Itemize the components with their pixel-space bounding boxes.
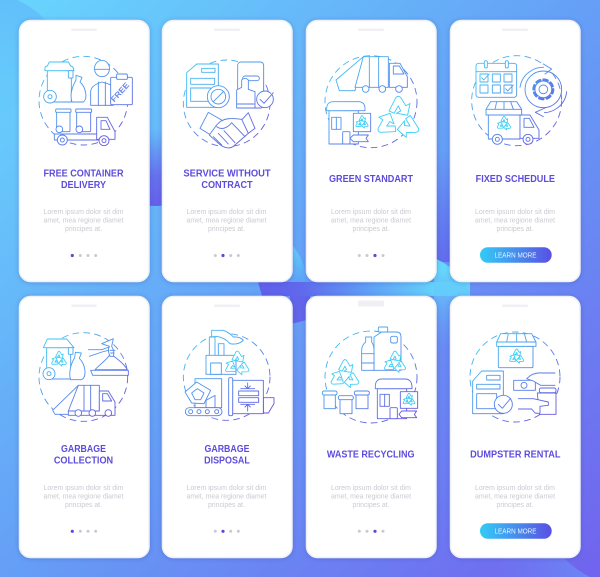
body text: principes at.: [65, 226, 102, 233]
body text: amet, mea regione diamet: [331, 217, 411, 224]
heading: GARBAGE: [204, 444, 250, 455]
icon: calendar, gear and truck: [472, 56, 567, 146]
heading: FREE CONTAINER: [44, 168, 124, 179]
heading: WASTE RECYCLING: [327, 449, 415, 460]
body text: amet, mea regione diamet: [186, 493, 267, 500]
body text: [44, 209, 124, 233]
body text: [475, 485, 555, 509]
panel: service without contract: [162, 20, 292, 282]
card background: [162, 296, 292, 558]
body text: amet, mea regione diamet: [186, 217, 267, 224]
body text: principes at.: [208, 502, 245, 509]
panel: green standart: [306, 20, 436, 282]
button: learn more: LEARN MORE: [494, 528, 537, 536]
body text: [186, 209, 267, 233]
heading: DISPOSAL: [204, 455, 250, 466]
body text: amet, mea regione diamet: [475, 493, 555, 500]
card background: [450, 296, 580, 558]
heading: SERVICE WITHOUT: [183, 168, 271, 179]
body text: amet, mea regione diamet: [331, 493, 411, 500]
heading: GREEN STANDART: [329, 174, 413, 185]
icon: garbage truck, shop and recycling: [325, 56, 423, 148]
heading: [183, 168, 271, 191]
pagination dots: [71, 28, 97, 257]
body text: [186, 485, 267, 509]
icon: factory, conveyor and press: [183, 330, 274, 420]
heading: COLLECTION: [54, 455, 113, 466]
card background: [20, 20, 149, 282]
label: FREE: FREE: [109, 80, 132, 104]
pagination dots: [358, 28, 384, 257]
body text: amet, mea regione diamet: [44, 493, 124, 500]
button: learn more: LEARN MORE: [494, 252, 537, 260]
heading: CONTRACT: [201, 180, 253, 191]
heading: DUMPSTER RENTAL: [470, 449, 560, 460]
body text: principes at.: [352, 226, 390, 233]
heading: [204, 444, 250, 466]
body text: Lorem ipsum dolor sit dim: [475, 485, 555, 492]
panel: free container delivery: [20, 20, 149, 282]
panel: waste recycling: [306, 296, 436, 558]
heading: GARBAGE: [61, 444, 106, 455]
panel: garbage disposal: [162, 296, 292, 558]
icon: dumpster, contract and payment: [470, 332, 560, 422]
body text: principes at.: [208, 226, 245, 233]
panel: fixed schedule: [450, 20, 580, 282]
body text: Lorem ipsum dolor sit dim: [331, 485, 411, 492]
pagination dots: [214, 304, 240, 533]
body text: principes at.: [496, 226, 534, 233]
heading: FIXED SCHEDULE: [476, 174, 555, 185]
body text: principes at.: [496, 502, 534, 509]
pagination dots: [358, 300, 384, 533]
body text: Lorem ipsum dolor sit dim: [44, 485, 124, 492]
notch: [502, 28, 528, 31]
button: learn more: [480, 247, 552, 263]
heading: [54, 444, 113, 466]
body text: principes at.: [65, 502, 102, 509]
card background: [306, 20, 436, 282]
panel: garbage collection: [20, 296, 149, 558]
body text: Lorem ipsum dolor sit dim: [475, 209, 555, 216]
icon: bins, worker and truck: [39, 56, 132, 146]
body text: principes at.: [352, 502, 390, 509]
body text: [331, 209, 411, 233]
icon: contract, phone and handshake: [183, 60, 273, 148]
body text: [331, 485, 411, 509]
card background: [20, 296, 149, 558]
body text: [44, 485, 124, 509]
panel: dumpster rental: [450, 296, 580, 558]
heading: [44, 168, 124, 191]
notch: [502, 304, 528, 307]
icon: bin, bag and truck: [39, 333, 128, 421]
body text: Lorem ipsum dolor sit dim: [186, 209, 267, 216]
card background: [450, 20, 580, 282]
card background: [306, 296, 436, 558]
card background: [162, 20, 292, 282]
button: learn more: [480, 523, 552, 539]
body text: [475, 209, 555, 233]
pagination dots: [71, 304, 97, 533]
body text: Lorem ipsum dolor sit dim: [331, 209, 411, 216]
body text: Lorem ipsum dolor sit dim: [186, 485, 267, 492]
icon: bottles, bins and shop: [322, 327, 418, 423]
body text: amet, mea regione diamet: [475, 217, 555, 224]
heading: DELIVERY: [61, 180, 106, 191]
body text: amet, mea regione diamet: [44, 217, 124, 224]
body text: Lorem ipsum dolor sit dim: [44, 209, 124, 216]
pagination dots: [214, 28, 240, 257]
